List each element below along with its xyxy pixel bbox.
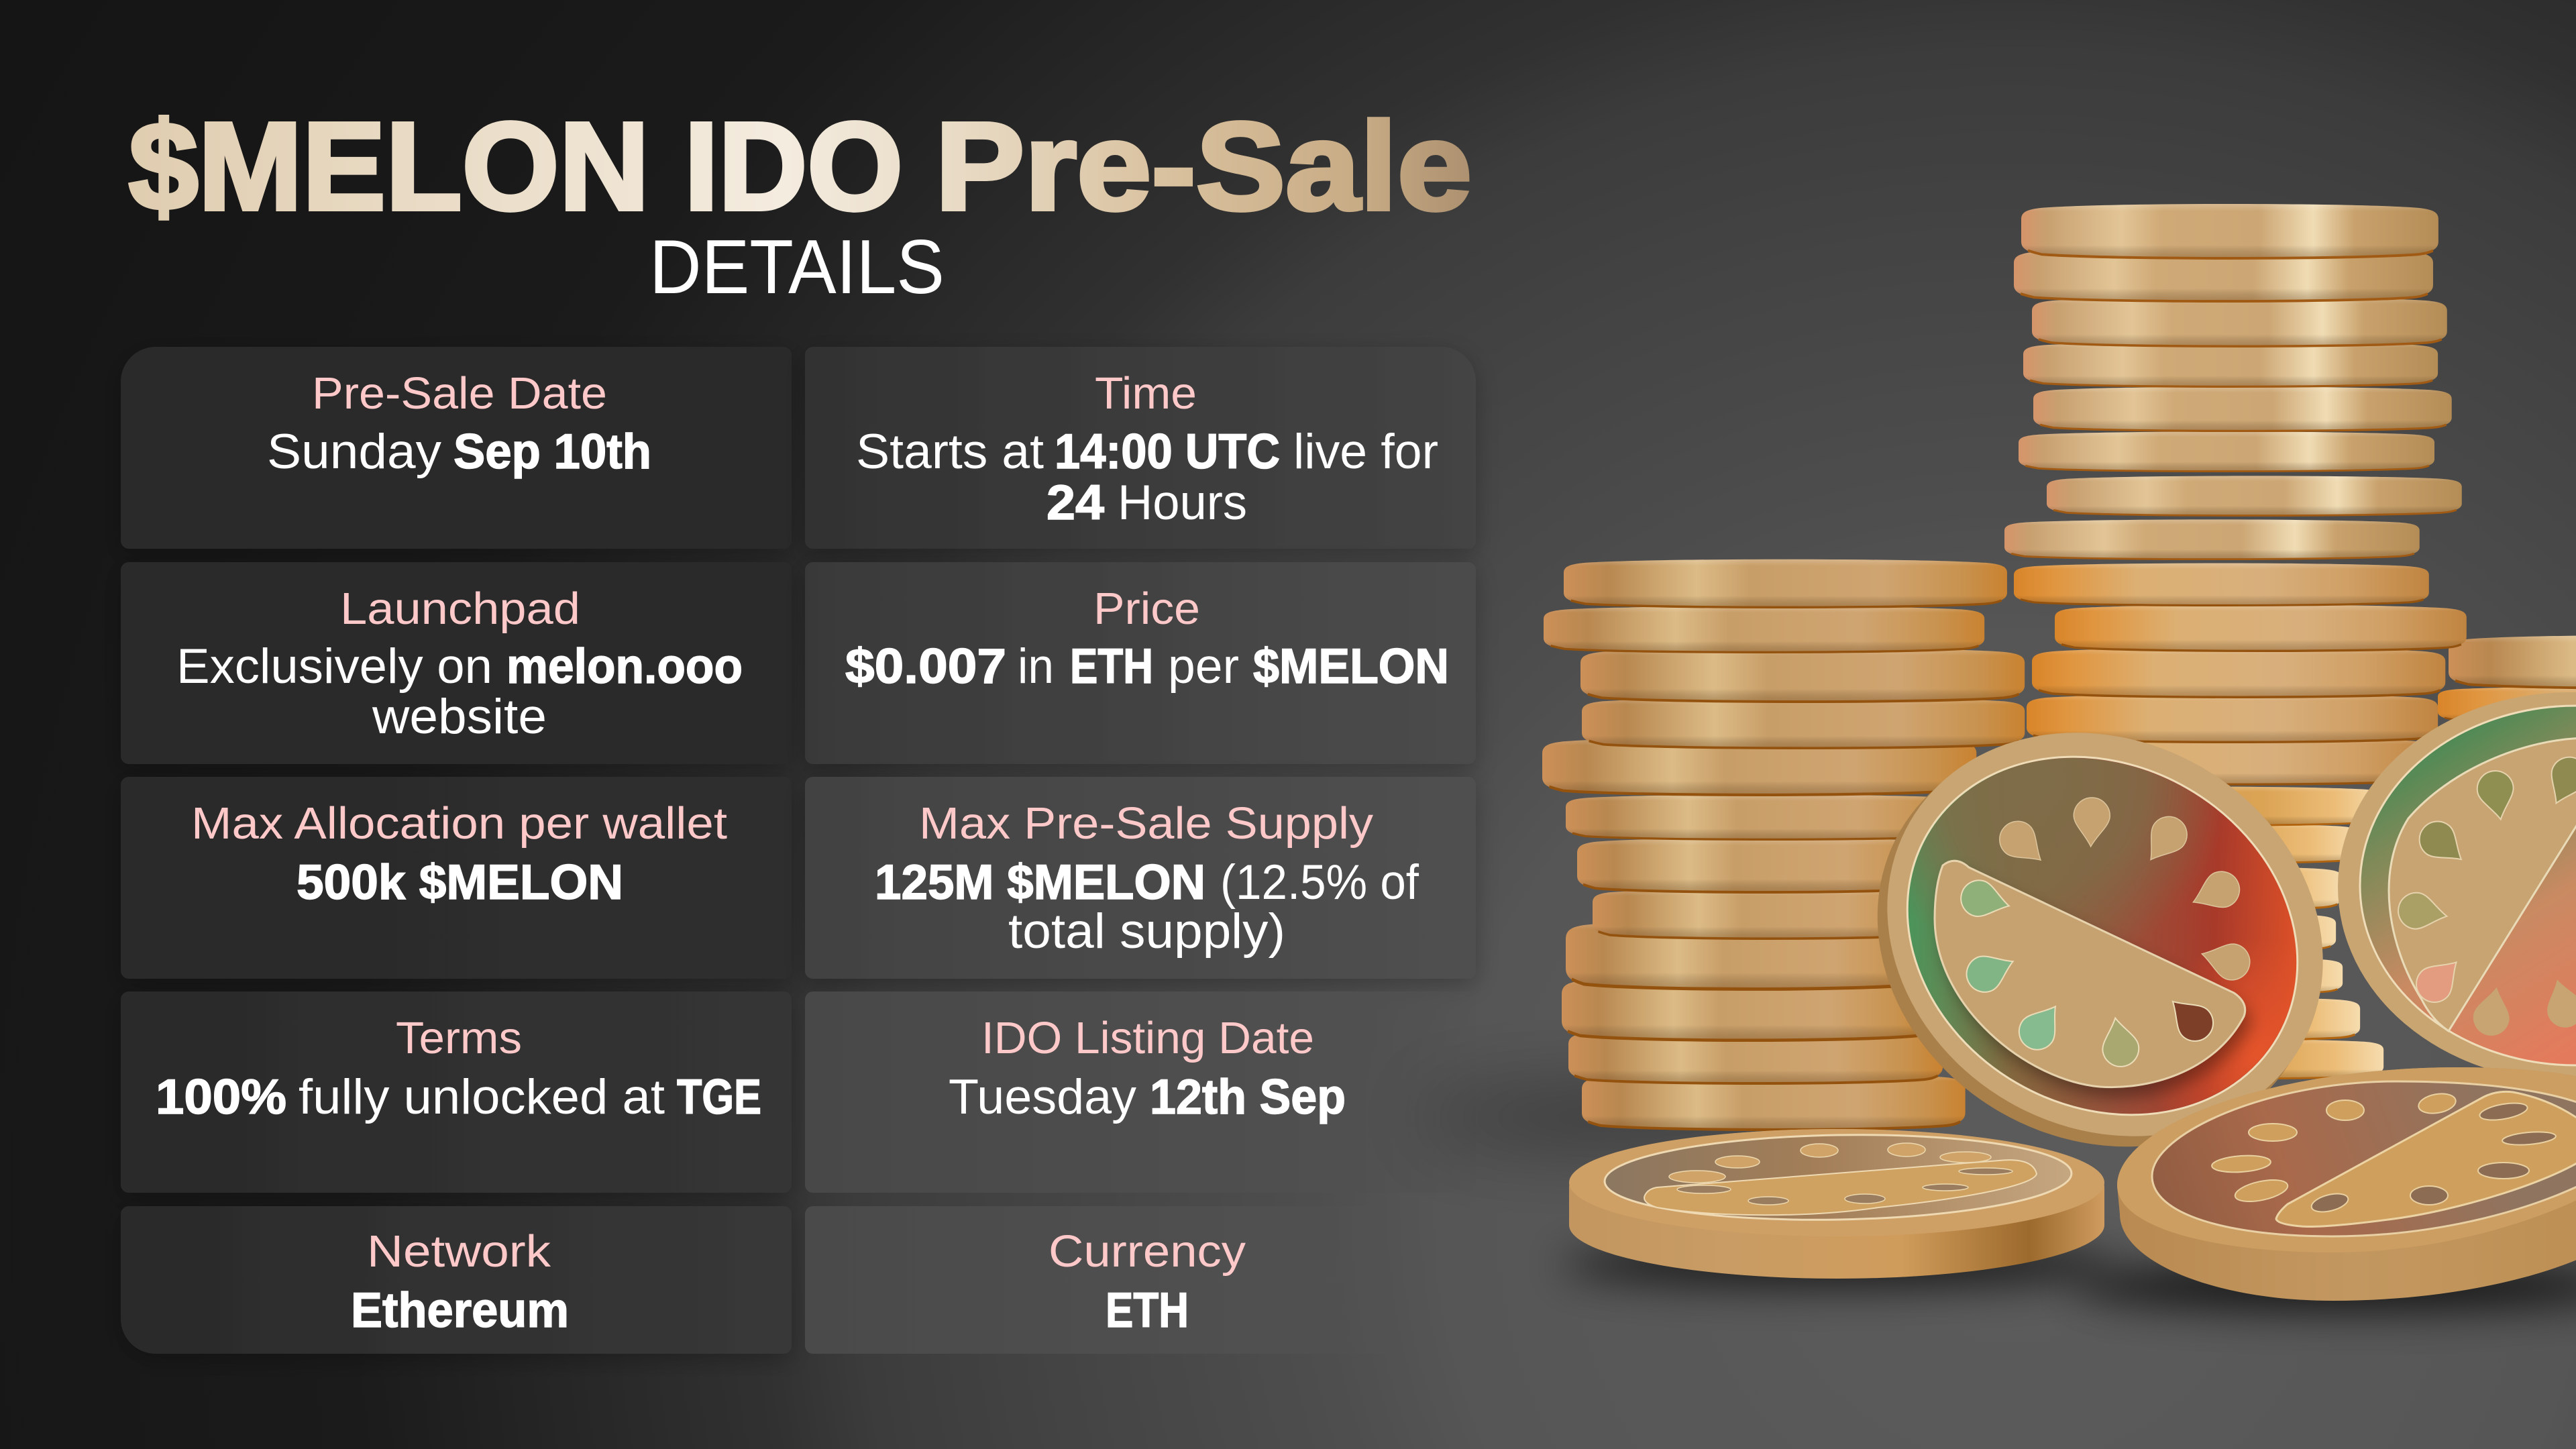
coin: upright centre with melon <box>1803 655 2397 1225</box>
melon slice <box>1935 861 2251 1098</box>
panel: listing date <box>805 991 1476 1193</box>
panel: terms <box>121 991 792 1193</box>
panel: launchpad: melon.ooo <box>506 639 743 694</box>
title: $MELON <box>129 97 649 236</box>
panel: listing date: IDO Listing Date <box>981 1013 1314 1063</box>
panel: currency: ETH <box>1106 1283 1189 1338</box>
panel: terms: Terms <box>396 1013 522 1063</box>
panel: price: per <box>1168 639 1239 694</box>
panel: max allocation: Max Allocation per wallet <box>191 798 727 849</box>
coin floor shadows <box>1422 1095 2576 1311</box>
panel: time: Time <box>1095 368 1197 419</box>
panel: currency: Currency <box>1049 1226 1246 1277</box>
panel: price: in <box>1018 639 1054 694</box>
panel: network: Ethereum <box>351 1283 569 1338</box>
panel: price: $0.007 <box>845 639 1006 694</box>
panel: launchpad: Launchpad <box>340 584 580 634</box>
panel: time: live for <box>1293 425 1438 479</box>
panel: listing date: Tuesday <box>949 1070 1137 1124</box>
panel: max supply: total supply) <box>1008 904 1285 959</box>
panel: price: Price <box>1093 584 1200 634</box>
title: IDO <box>684 97 903 236</box>
panel: max supply: Max Pre-Sale Supply <box>919 798 1374 849</box>
panel: terms: 100% <box>156 1070 286 1124</box>
coin stack: tall <box>1933 204 2467 1079</box>
panel: network: Network <box>367 1226 551 1277</box>
panel: time <box>805 347 1476 549</box>
coin: flat left <box>1569 1129 2104 1279</box>
subtitle: DETAILS <box>649 225 945 310</box>
title <box>129 97 1472 236</box>
panel: network <box>121 1206 792 1354</box>
panel: pre-sale date <box>121 347 792 549</box>
panel: time: 14:00 UTC <box>1055 425 1280 479</box>
coin: upright right <box>2338 692 2576 1081</box>
panel: price: ETH <box>1070 639 1153 694</box>
panel: time: Starts at <box>856 425 1044 479</box>
coin: flat right <box>2117 1067 2576 1301</box>
panel: terms: fully unlocked at <box>299 1070 665 1124</box>
panel: time: 24 <box>1046 476 1104 530</box>
panel: max allocation: 500k $MELON <box>297 855 623 910</box>
panel: time: Hours <box>1118 476 1247 530</box>
panel: pre-sale date: Pre-Sale Date <box>312 368 607 419</box>
panel: launchpad: Exclusively on <box>176 639 492 694</box>
panel: price: $MELON <box>1253 639 1449 694</box>
panel: pre-sale date: Sunday <box>267 425 442 479</box>
coin stack: right rear <box>2438 635 2576 723</box>
panel: launchpad: website <box>372 690 547 744</box>
panel: max supply: 125M $MELON <box>875 855 1205 910</box>
panel: currency <box>805 1206 1476 1354</box>
details table <box>121 347 1476 1354</box>
coin stack: left <box>1542 559 2025 1130</box>
panel: listing date: 12th Sep <box>1150 1070 1346 1124</box>
title: Pre-Sale <box>935 97 1472 236</box>
panel: pre-sale date: Sep 10th <box>453 425 651 479</box>
panel: max supply: (12.5% of <box>1220 855 1419 910</box>
panel: launchpad <box>121 562 792 764</box>
panel: max allocation <box>121 777 792 979</box>
melon seeds <box>1992 797 2254 984</box>
panel: max supply <box>805 777 1476 979</box>
panel: price <box>805 562 1476 764</box>
panel: terms: TGE <box>677 1070 761 1124</box>
